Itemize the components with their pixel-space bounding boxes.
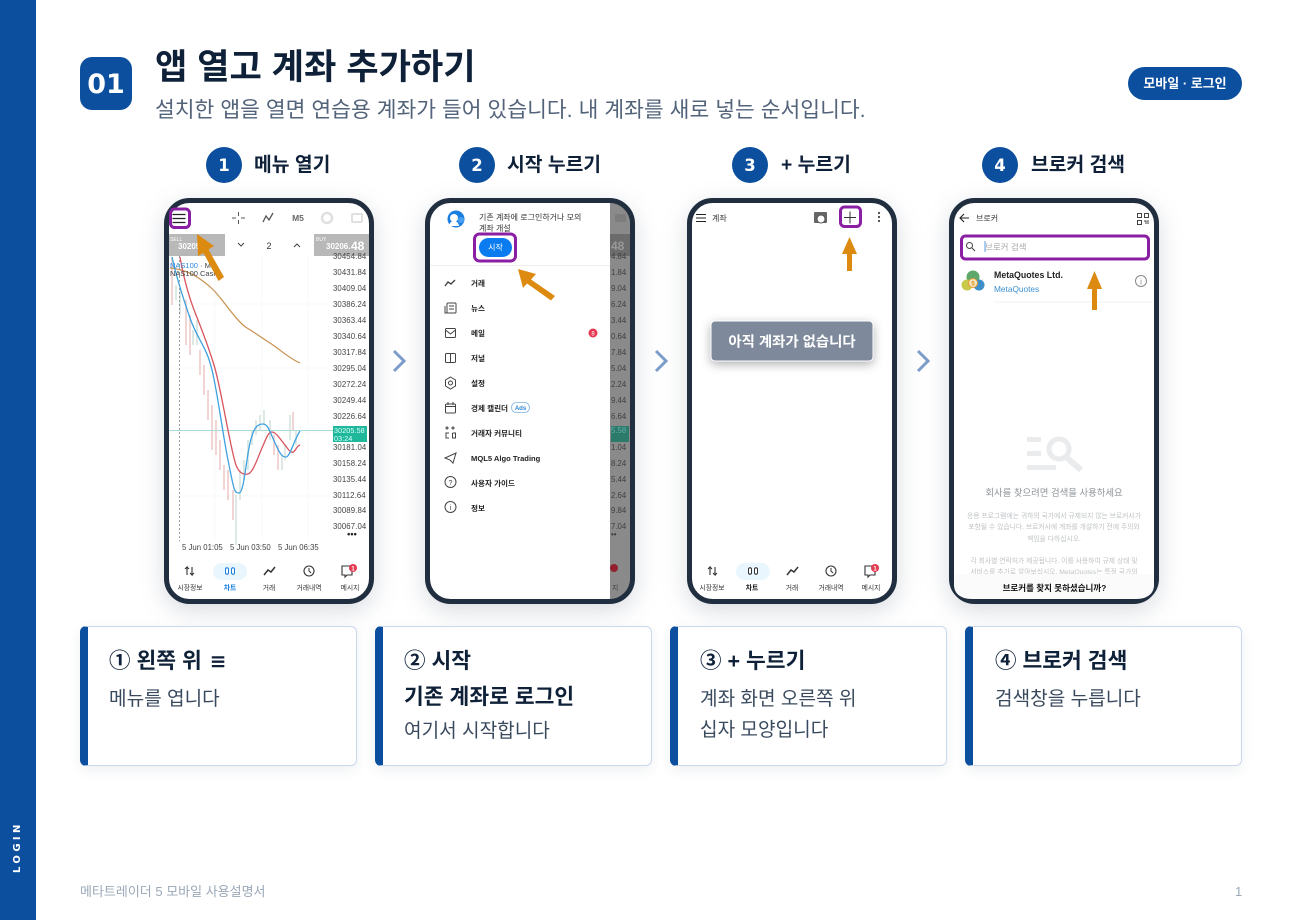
empty accounts toast	[711, 321, 873, 361]
menu list	[445, 278, 598, 513]
bottom navigation: 시장정보	[177, 583, 203, 592]
subtitle: 설치한 앱을 열면 연습용 계좌가 들어 있습니다. 내 계좌를 새로 넣는 순서입니다.	[155, 98, 866, 122]
MetaQuotes broker row	[962, 270, 1152, 302]
empty state illustration	[1027, 437, 1081, 470]
dimmed background screen: 9.44	[611, 396, 627, 405]
price axis: 30340.64	[333, 332, 367, 341]
price axis: 30158.24	[333, 459, 367, 468]
category pill: 모바일 · 로그인	[1143, 76, 1227, 91]
price axis: 30249.44	[333, 396, 367, 405]
bottom navigation: 1	[873, 566, 877, 572]
menu list: 경제 캘린더	[471, 403, 508, 413]
dimmed background screen: 2.24	[611, 380, 627, 389]
dimmed background screen	[610, 203, 630, 599]
section number badge: 01	[87, 69, 125, 100]
card 3 body: 십자 모양입니다	[700, 720, 828, 741]
menu list: 8	[591, 332, 595, 338]
sell and buy bar: BUY	[316, 237, 327, 243]
menu list: 저널	[471, 353, 485, 363]
price axis: 03:24	[334, 434, 352, 443]
time axis: 5 Jun 01:05	[182, 543, 223, 552]
dimmed background screen: ••	[611, 530, 617, 539]
card 3 body	[700, 688, 856, 741]
card 1 title: ① 왼쪽 위 ≡	[109, 649, 227, 673]
price chart	[169, 256, 333, 545]
phone 3: accounts screen	[678, 196, 906, 620]
dimmed background screen: 48	[611, 239, 625, 253]
dimmed background screen: 6.64	[611, 412, 627, 421]
dimmed background screen: 6.24	[611, 300, 627, 309]
time axis: 5 Jun 06:35	[278, 543, 319, 552]
menu list: Ads	[515, 406, 527, 412]
step 2 heading: 시작 누르기	[507, 155, 601, 176]
toolbar icons	[232, 212, 362, 224]
app bar	[960, 214, 1148, 224]
sell and buy bar: 48	[351, 239, 365, 253]
sell and buy bar	[169, 234, 369, 256]
menu list: 뉴스	[471, 304, 485, 313]
bottom navigation: 차트	[746, 583, 758, 592]
MetaQuotes broker row: MetaQuotes Ltd.	[994, 270, 1063, 280]
sell and buy bar: 30205.	[178, 242, 202, 251]
phone 1: chart screen	[154, 196, 384, 620]
price axis: 30317.84	[333, 348, 367, 357]
menu list: MQL5 Algo Trading	[471, 454, 541, 463]
bottom navigation	[699, 563, 880, 592]
page number: 1	[1235, 884, 1242, 899]
start button highlight: 시작	[488, 242, 503, 252]
bottom navigation: 메시지	[341, 583, 359, 592]
dimmed background screen: 7.04	[611, 522, 627, 531]
search box highlight	[962, 236, 1148, 259]
section number badge	[80, 57, 132, 110]
price axis: 30135.44	[333, 475, 367, 484]
bottom navigation: 차트	[224, 583, 236, 592]
dimmed background screen: 4.84	[611, 252, 627, 261]
phone 4: broker search	[940, 196, 1168, 620]
sell and buy bar: 2	[266, 241, 272, 251]
price axis: 30226.64	[333, 412, 367, 421]
price axis: 30181.04	[333, 443, 367, 452]
broker not found footer	[954, 574, 1154, 599]
bottom navigation: 메시지	[862, 583, 880, 592]
time axis	[182, 543, 319, 552]
step 3 heading: 3	[744, 156, 756, 175]
card 4 body: 검색창을 누릅니다	[995, 689, 1141, 710]
price axis: 30409.04	[333, 284, 367, 293]
dimmed background screen: 지	[612, 583, 618, 592]
price axis	[331, 252, 369, 539]
dimmed background screen: 9.04	[611, 284, 627, 293]
card 2 subtitle: 기존 계좌로 로그인	[404, 685, 574, 709]
bottom navigation: 시장정보	[699, 583, 725, 592]
menu icon highlight	[170, 209, 190, 228]
MetaQuotes broker row: i	[1140, 278, 1142, 286]
dimmed background screen: 3.44	[611, 316, 627, 325]
sell and buy bar: 30206.	[326, 242, 350, 251]
dimmed background screen: 5.58	[611, 426, 626, 435]
arrow pointing to menu	[197, 234, 224, 281]
price axis: 30431.84	[333, 268, 367, 277]
empty state text: 포함될 수 있습니다. 브로커사에 계좌를 개설하기 전에 주의와	[968, 522, 1140, 531]
dimmed background screen: 9.84	[611, 506, 627, 515]
dimmed background screen: 7.84	[611, 348, 627, 357]
card 2 title: ② 시작	[404, 649, 471, 673]
app bar	[696, 212, 880, 223]
start button highlight	[474, 234, 516, 261]
card 3 body: 계좌 화면 오른쪽 위	[700, 689, 856, 710]
MetaQuotes broker row: MetaQuotes	[994, 284, 1039, 294]
empty state text: 응용 프로그램에는 귀하의 국가에서 규제되지 않는 브로커사가	[967, 511, 1142, 520]
dimmed background screen: 8.24	[611, 459, 627, 468]
arrow pointing to search box	[1087, 271, 1102, 310]
title: 앱 열고 계좌 추가하기	[155, 48, 476, 87]
dimmed background screen: 5.44	[611, 475, 627, 484]
menu list: 정보	[471, 503, 485, 513]
dimmed background screen: 2.64	[611, 491, 627, 500]
empty state text: 책임을 다하십시오.	[1027, 534, 1081, 543]
footer title: 메타트레이더 5 모바일 사용설명서	[80, 884, 266, 899]
dimmed background screen: 1.84	[611, 268, 627, 277]
caption card 4	[965, 626, 1242, 766]
arrow pointing to plus button	[842, 237, 857, 271]
empty state text: 서비스를 추가로 알아보십시오. MetaQuotes는 특정 국가의	[970, 567, 1138, 576]
price chart: NAS100 Cash	[170, 269, 218, 278]
bottom navigation	[177, 563, 359, 592]
bottom navigation: 거래내역	[296, 583, 322, 592]
caption card 1	[80, 626, 357, 766]
broker not found footer: 브로커를 찾지 못하셨습니까?	[1003, 583, 1106, 593]
chevron arrow 3	[917, 350, 930, 372]
menu list: 거래	[471, 278, 485, 288]
app bar: 계좌	[712, 213, 727, 223]
search box highlight: 브로커 검색	[985, 242, 1026, 252]
step 1 heading	[206, 147, 330, 183]
dimmed background screen: 1.04	[611, 443, 627, 452]
bottom navigation: 1	[351, 566, 355, 572]
caption card 2	[375, 626, 652, 766]
price axis: 30067.04	[333, 522, 367, 531]
account header: 기존 계좌에 로그인하거나 모의	[479, 212, 581, 222]
step 4 heading: 브로커 검색	[1031, 155, 1125, 176]
step 2 heading	[459, 147, 601, 183]
caption card 3	[670, 626, 947, 766]
menu list: 메일	[471, 328, 485, 338]
menu list: i	[450, 505, 452, 512]
empty state text: 회사를 찾으려면 검색을 사용하세요	[985, 487, 1123, 498]
empty state text: 각 회사별 연락처가 제공됩니다. 이를 사용하여 규제 상태 및	[970, 556, 1138, 565]
arrow pointing to start button	[518, 269, 555, 300]
account header	[448, 210, 581, 233]
card 1 body: 메뉴를 엽니다	[109, 689, 220, 710]
step 1 heading: 메뉴 열기	[254, 155, 330, 176]
step 3 heading	[732, 147, 851, 183]
plus button highlight	[840, 207, 860, 226]
empty accounts toast: 아직 계좌가 없습니다	[728, 334, 856, 350]
price axis: 30272.24	[333, 380, 367, 389]
menu list: 사용자 가이드	[471, 478, 515, 488]
step 4 heading	[982, 147, 1125, 183]
price axis: 30089.84	[333, 506, 367, 515]
sidebar	[0, 0, 36, 920]
bottom navigation: 거래내역	[818, 583, 844, 592]
chevron arrow 2	[655, 350, 668, 372]
sell and buy bar: SELL	[170, 237, 182, 243]
app bar: 브로커	[976, 214, 998, 223]
price axis: 30386.24	[333, 300, 367, 309]
step 4 heading: 4	[994, 156, 1006, 175]
price axis: 30363.44	[333, 316, 367, 325]
chevron arrow 1	[393, 350, 406, 372]
MetaQuotes broker row: 5	[971, 282, 975, 288]
price chart: NAS100 · M5	[170, 261, 215, 270]
menu list: 거래자 커뮤니티	[471, 428, 522, 438]
menu list: ?	[449, 480, 453, 487]
price axis: 30295.04	[333, 364, 367, 373]
price axis: 30112.64	[333, 491, 366, 500]
toolbar icons: M5	[292, 213, 304, 223]
card 2 body: 여기서 시작합니다	[404, 721, 550, 742]
step 2 heading: 2	[471, 156, 483, 175]
price axis: •••	[347, 529, 357, 539]
category pill	[1128, 67, 1242, 100]
price axis: 30454.84	[333, 252, 367, 261]
bottom navigation: 거래	[263, 583, 275, 592]
card 4 title: ④ 브로커 검색	[995, 649, 1127, 673]
step 3 heading: + 누르기	[781, 155, 851, 176]
card 3 title: ③ + 누르기	[700, 649, 805, 673]
phone 2: side menu	[416, 196, 644, 620]
menu list: 설정	[471, 378, 485, 388]
bottom navigation: 거래	[786, 583, 798, 592]
price axis: 30205.58	[334, 426, 365, 435]
dimmed background screen: 5.04	[611, 364, 627, 373]
time axis: 5 Jun 03:50	[230, 543, 271, 552]
dimmed background screen: 0.64	[611, 332, 627, 341]
step 1 heading: 1	[218, 156, 230, 175]
account header: 계좌 개설	[479, 223, 511, 233]
empty state text	[967, 487, 1142, 576]
sidebar label: LOGIN	[12, 821, 23, 873]
